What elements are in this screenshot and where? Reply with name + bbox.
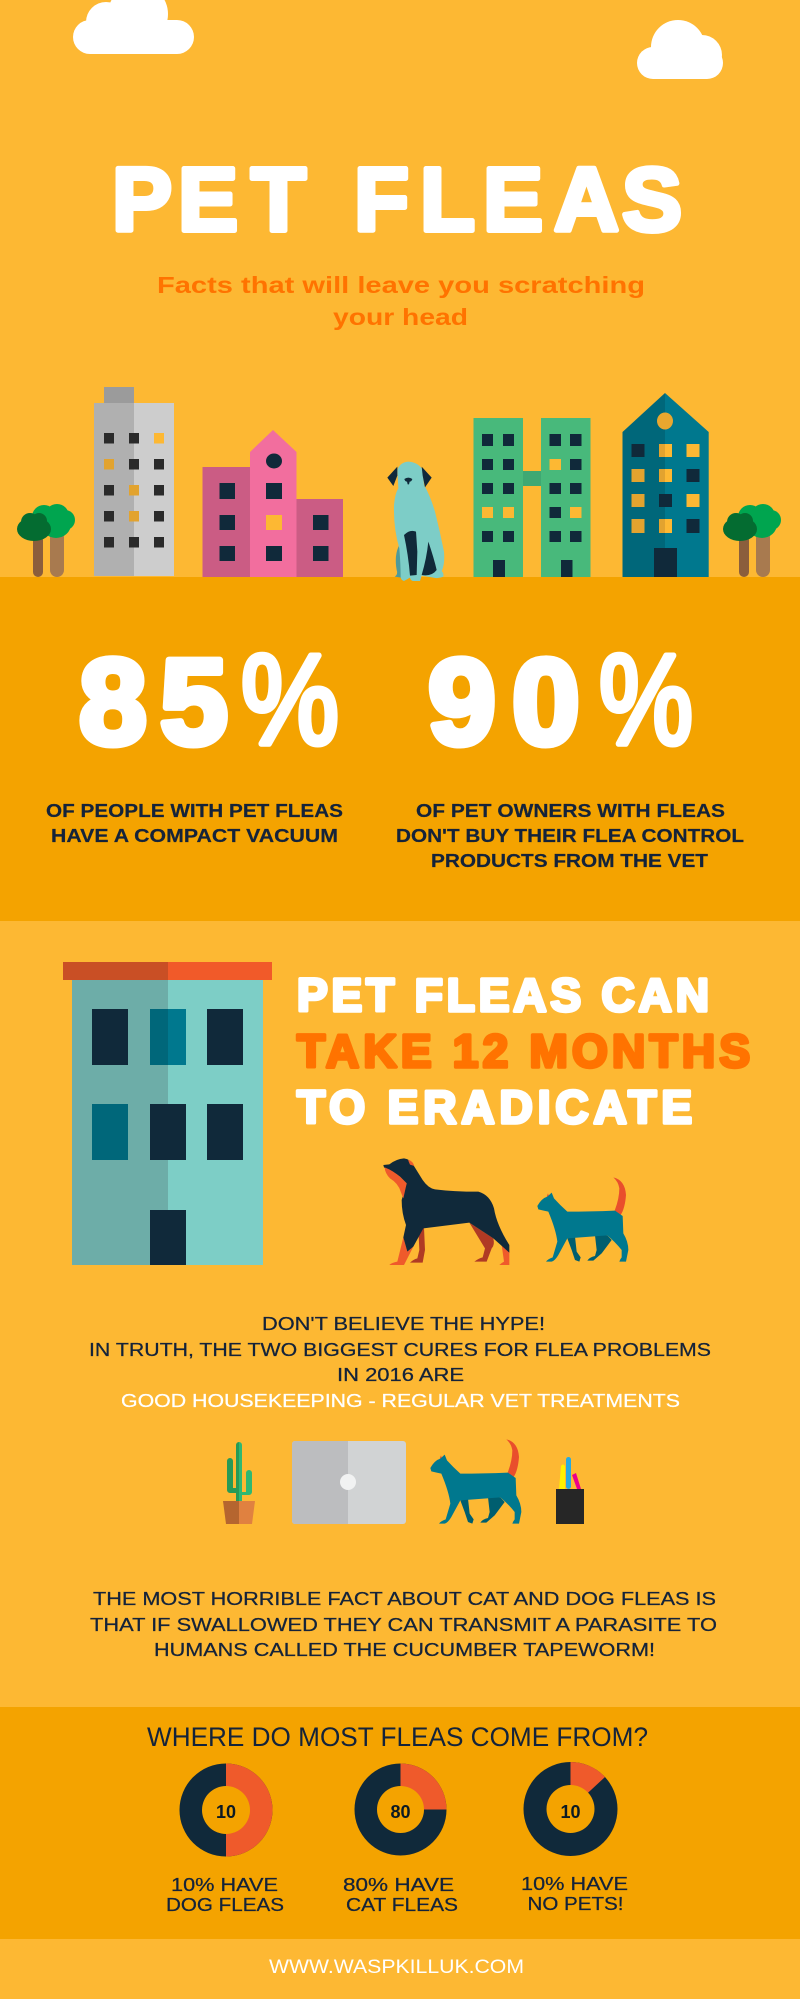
headline: eradicate: PET FLEAS CAN [297, 969, 709, 1021]
stat: 90%: % [599, 629, 693, 772]
donut: no pets [524, 1762, 618, 1856]
label: no pets: NO PETS! [528, 1893, 624, 1914]
band: donut section [0, 1707, 800, 1939]
icon: trees right [723, 504, 781, 577]
icon: pencil cup [556, 1457, 584, 1524]
icon: cat walking lower [430, 1439, 521, 1524]
text: horrible fact: HUMANS CALLED THE CUCUMBER TAPEWORM! [154, 1640, 655, 1660]
donut: cat fleas [354, 1764, 446, 1856]
heading: where fleas come from: WHERE DO MOST FLEAS COME FROM? [147, 1722, 648, 1752]
caption: 85%: HAVE A COMPACT VACUUM [51, 826, 338, 846]
stat: 90%: 90 [428, 634, 580, 770]
caption: 90%: OF PET OWNERS WITH FLEAS [416, 801, 725, 821]
icon: cat walking [537, 1177, 628, 1262]
large teal building [63, 962, 272, 1265]
pink building [202, 430, 343, 577]
headline: eradicate: TO ERADICATE [297, 1081, 692, 1133]
stat: 85%: % [241, 629, 339, 772]
headline: eradicate [297, 969, 750, 1133]
teal building [622, 393, 709, 577]
band: stats [0, 577, 800, 921]
text: horrible fact [90, 1589, 717, 1660]
icon: trees left [17, 504, 75, 577]
text: horrible fact: THAT IF SWALLOWED THEY CAN TRANSMIT A PARASITE TO [90, 1615, 717, 1635]
text: horrible fact: THE MOST HORRIBLE FACT ABOUT CAT AND DOG FLEAS IS [93, 1589, 716, 1609]
text: cures: DON'T BELIEVE THE HYPE! [262, 1314, 545, 1334]
text: cures: IN 2016 ARE [337, 1365, 464, 1385]
text: cures: IN TRUTH, THE TWO BIGGEST CURES FOR FLEA PROBLEMS [89, 1340, 711, 1360]
icon: cloud right [637, 20, 723, 79]
subtitle: your head [333, 304, 468, 330]
text: cures [89, 1314, 711, 1411]
label: no pets [521, 1873, 628, 1914]
donut: no pets: 10 [560, 1802, 581, 1822]
icon: dog [383, 1158, 509, 1265]
title: PET FLEAS [112, 150, 682, 250]
headline: eradicate: TAKE 12 MONTHS [297, 1025, 750, 1077]
label: cat fleas: CAT FLEAS [346, 1894, 458, 1915]
subtitle [157, 272, 645, 330]
text: cures: GOOD HOUSEKEEPING - REGULAR VET TREATMENTS [121, 1391, 680, 1411]
green towers [474, 418, 590, 577]
gray building [94, 387, 174, 576]
label: no pets: 10% HAVE [521, 1873, 628, 1894]
footer url: WWW.WASPKILLUK.COM [269, 1957, 524, 1978]
caption: 90%: PRODUCTS FROM THE VET [431, 851, 708, 871]
caption: 90%: DON'T BUY THEIR FLEA CONTROL [396, 826, 744, 846]
label: dog fleas [166, 1874, 284, 1915]
icon: sitting dog [387, 462, 444, 581]
subtitle: Facts that will leave you scratching [157, 272, 645, 298]
icon: cactus [223, 1442, 255, 1524]
caption: 90% [396, 801, 744, 871]
donut: cat fleas: 80 [390, 1802, 411, 1822]
stat: 90% [428, 629, 693, 772]
label: cat fleas [343, 1874, 458, 1915]
stat: 85% [79, 629, 339, 772]
caption: 85% [46, 801, 343, 846]
donut: dog fleas [180, 1764, 272, 1856]
label: cat fleas: 80% HAVE [343, 1874, 454, 1895]
donut: dog fleas: 10 [216, 1802, 236, 1822]
stat: 85%: 85 [79, 634, 228, 770]
icon: cloud left [73, 0, 194, 54]
label: dog fleas: 10% HAVE [171, 1874, 278, 1895]
icon: laptop [292, 1441, 406, 1524]
caption: 85%: OF PEOPLE WITH PET FLEAS [46, 801, 343, 821]
label: dog fleas: DOG FLEAS [166, 1894, 284, 1915]
